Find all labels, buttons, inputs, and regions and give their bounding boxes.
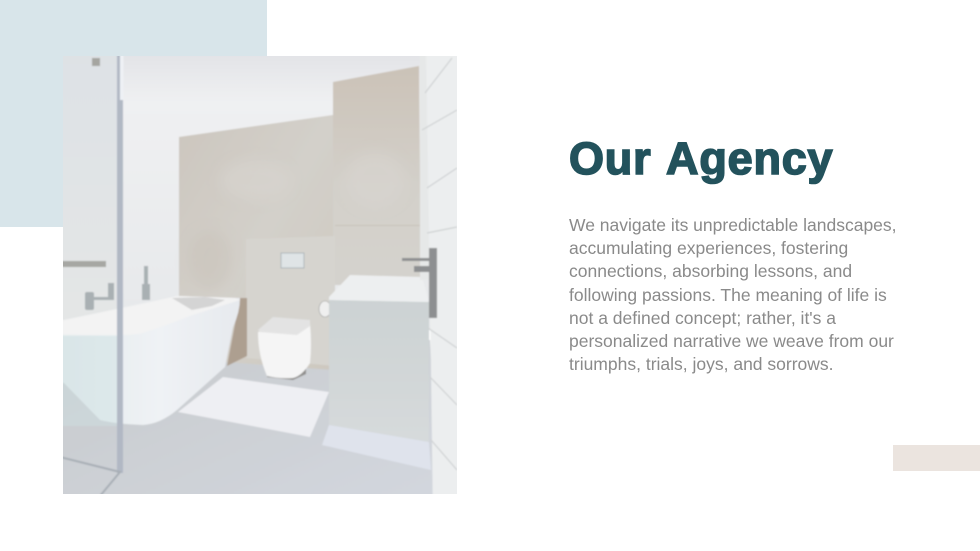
vanity cabinet bbox=[329, 300, 429, 442]
toilet roll bbox=[319, 301, 331, 317]
taps bbox=[85, 266, 150, 310]
bathtub bbox=[40, 296, 240, 425]
tiled pillar bbox=[333, 66, 421, 285]
tub shadow on tiles bbox=[227, 298, 247, 366]
sink top bbox=[329, 275, 428, 302]
toilet bbox=[258, 317, 311, 380]
ceiling and side wall bbox=[40, 30, 480, 330]
low wall bbox=[246, 236, 335, 366]
tile mottling bbox=[188, 152, 405, 290]
body text: not a defined concept; rather, it's a bbox=[569, 308, 836, 328]
shower head bbox=[92, 58, 100, 66]
wall strip bbox=[420, 40, 429, 280]
door bbox=[422, 40, 480, 520]
body text: triumphs, trials, joys, and sorrows. bbox=[569, 354, 834, 374]
shower wall bbox=[40, 30, 118, 330]
body text: following passions. The meaning of life is bbox=[569, 285, 887, 305]
title: Our Agency bbox=[569, 133, 833, 184]
body text: We navigate its unpredictable landscapes, bbox=[569, 215, 897, 235]
pillar joint bbox=[335, 225, 420, 226]
door handle bbox=[402, 248, 437, 318]
photo: modern bathroom bbox=[63, 56, 457, 494]
bath mat bbox=[178, 377, 329, 437]
floor bbox=[40, 340, 440, 520]
body text: connections, absorbing lessons, and bbox=[569, 261, 852, 281]
glass tint bbox=[40, 336, 118, 426]
glass door frame bbox=[40, 40, 124, 496]
bright floor reflection bbox=[322, 425, 431, 470]
tiled back wall bbox=[179, 115, 333, 370]
decorative block: beige bottom-right bbox=[893, 445, 980, 471]
body text bbox=[569, 215, 897, 374]
flush plate bbox=[281, 253, 304, 268]
body text: personalized narrative we weave from our bbox=[569, 331, 894, 351]
body text: accumulating experiences, fostering bbox=[569, 238, 848, 258]
towel rail bbox=[40, 261, 106, 267]
decorative block: light blue top-left bbox=[0, 0, 267, 227]
